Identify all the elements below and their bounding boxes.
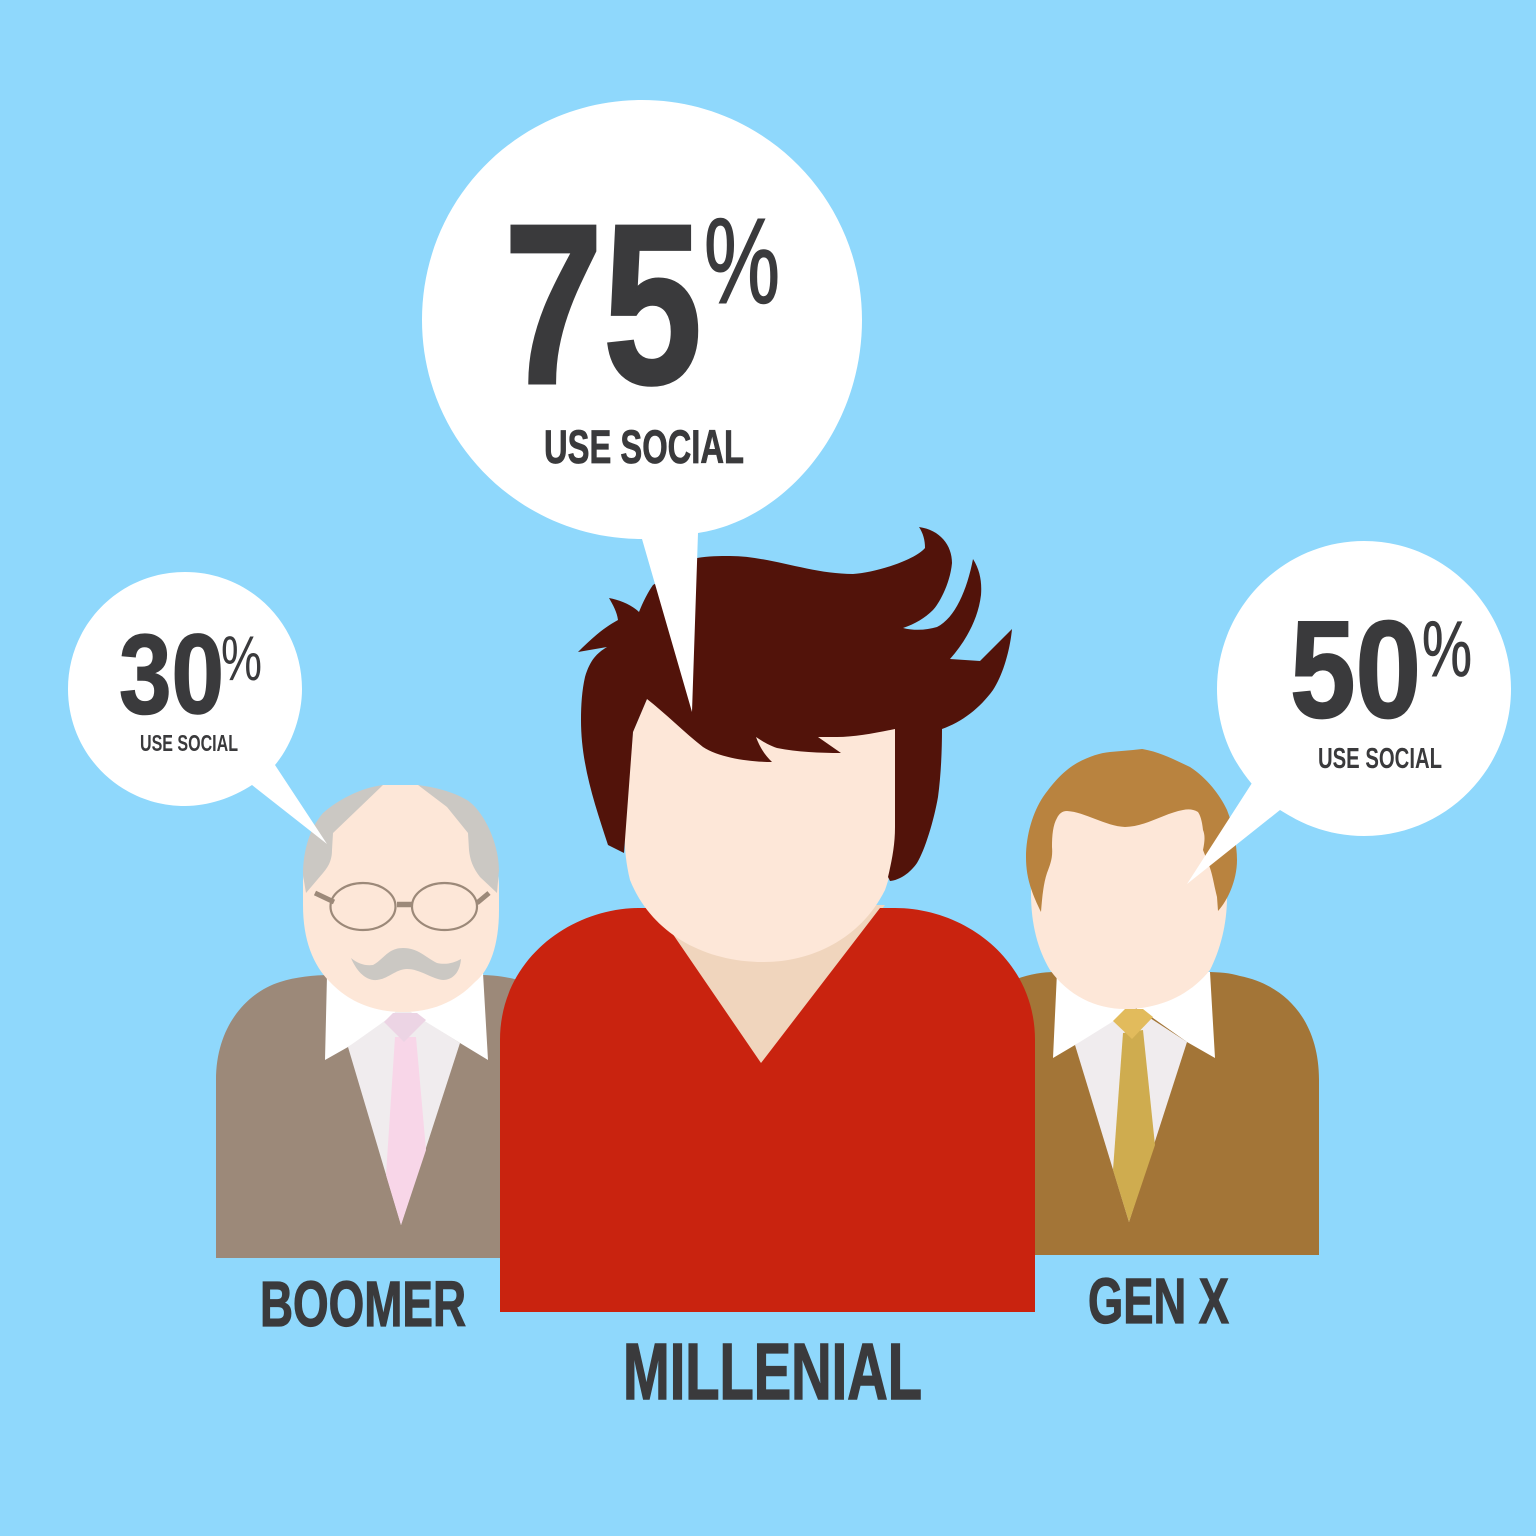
figure 50: 50: [1290, 593, 1421, 747]
bubble: Boomer 30%: [68, 572, 327, 844]
bubble shape: [422, 100, 862, 712]
millenial sweater: [500, 908, 1035, 1312]
boomer tie knot: [384, 1013, 426, 1042]
genx tie knot: [1113, 1009, 1153, 1039]
boomer face: [303, 785, 499, 1012]
boomer shirt: [348, 1005, 460, 1225]
boomer tie: [386, 1037, 426, 1225]
genx shirt: [1075, 1005, 1187, 1222]
bubble shape: [68, 572, 327, 844]
figure: Millenial: [500, 527, 1035, 1312]
genx tie: [1113, 1030, 1155, 1222]
figure: Boomer: [216, 785, 545, 1258]
label: Gen X: GEN X: [1088, 1265, 1229, 1337]
figure 30: 30: [119, 611, 224, 737]
genx hair: [1026, 749, 1237, 912]
bubble: Millenial 75%: [422, 100, 862, 712]
millenial hair: [578, 527, 1012, 881]
figure 75: 75: [504, 178, 702, 432]
boomer collar: [325, 973, 488, 1060]
caption: USE SOCIAL: [1318, 743, 1442, 775]
millenial face: [625, 690, 896, 962]
percent sign: %: [1422, 604, 1472, 693]
genx face: [1031, 800, 1227, 1009]
millenial neck: [650, 905, 885, 1065]
label: Boomer: BOOMER: [260, 1268, 466, 1340]
label: Millenial: MILLENIAL: [623, 1327, 922, 1416]
genx collar: [1053, 972, 1215, 1058]
caption: USE SOCIAL: [140, 730, 238, 756]
bubble: Gen X 50%: [1187, 541, 1511, 884]
percent sign: %: [704, 193, 780, 329]
figure: Gen X: [985, 749, 1319, 1255]
percent sign: %: [221, 624, 262, 694]
bubble shape: [1187, 541, 1511, 884]
boomer moustache: [351, 948, 461, 980]
boomer jacket: [216, 975, 545, 1258]
boomer hair: [303, 785, 499, 893]
genx jacket: [985, 972, 1319, 1255]
caption: USE SOCIAL: [544, 420, 744, 473]
boomer glasses: [315, 883, 489, 930]
